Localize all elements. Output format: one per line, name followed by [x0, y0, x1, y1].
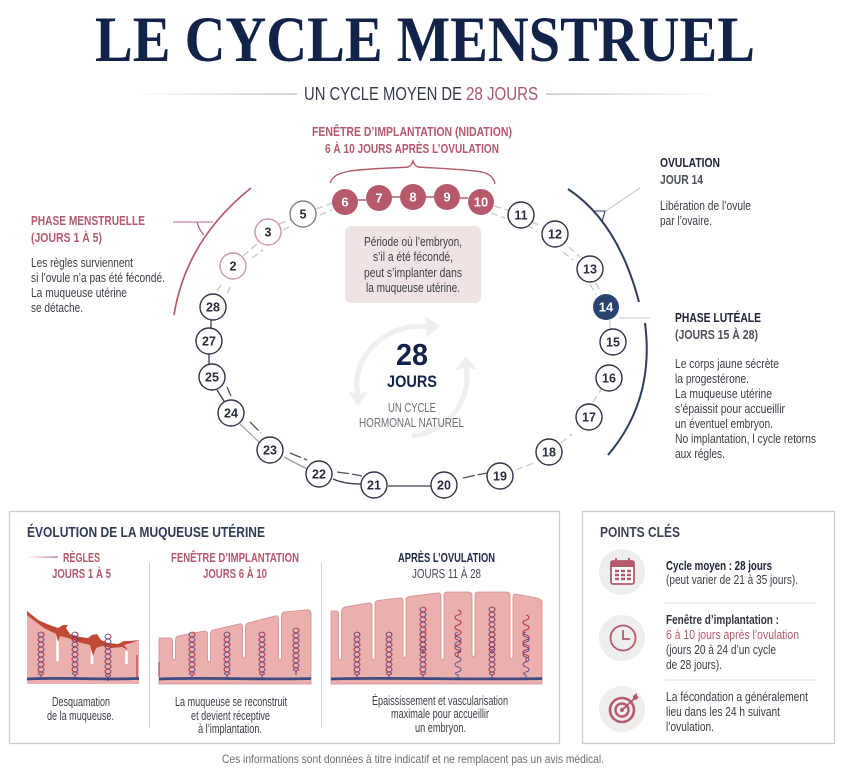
day circles: 18 — [542, 446, 556, 460]
text: implantation window: (jours 20 à 24 d’un cycle — [666, 643, 776, 657]
panel: menstrual phase: PHASE MENSTRUELLE — [31, 213, 145, 228]
text: implantation window: de 28 jours). — [666, 658, 722, 672]
callout: implantation period: peut s’implanter dans — [364, 266, 462, 280]
day circles: 10 — [474, 194, 488, 210]
title: LE CYCLE MENSTRUEL — [95, 4, 755, 76]
text: implantation window — [666, 613, 799, 672]
callout: implantation period: la muqueuse utérine. — [366, 281, 460, 295]
cycle ring: days 1 to 28 — [196, 184, 626, 498]
day circles: 2 — [230, 260, 237, 274]
day circles: 11 — [514, 208, 528, 222]
day circles: 22 — [312, 468, 326, 482]
panel: menstrual phase: Les règles surviennent — [31, 256, 133, 270]
text: fertilisation — [666, 690, 808, 734]
heading: key points: POINTS CLÉS — [600, 524, 680, 541]
day circles: 16 — [602, 372, 616, 386]
panel: menstrual phase: (JOURS 1 À 5) — [31, 230, 102, 245]
day circles: 12 — [548, 228, 562, 242]
subtitle: UN CYCLE MOYEN DE — [304, 84, 462, 104]
column: implantation window: JOURS 6 À 10 — [203, 566, 267, 581]
icon: calendar — [599, 549, 645, 595]
day circles: 15 — [606, 336, 620, 350]
center: 28 days: JOURS — [387, 373, 437, 391]
heading: implantation window: 6 À 10 JOURS APRÈS L’OVULATION — [325, 141, 499, 156]
day circles: 8 — [409, 190, 417, 204]
icon: circular arrows — [349, 317, 476, 436]
text: fertilisation: La fécondation a généralement — [666, 690, 808, 704]
column: after ovulation: Épaississement et vascularisation — [372, 693, 508, 708]
panel: menstrual phase: se détache. — [31, 301, 83, 315]
day circles: 9 — [443, 190, 451, 204]
illustration: thick lining — [331, 592, 542, 684]
column: implantation window: FENÊTRE D’IMPLANTATION — [171, 550, 299, 565]
arc: menstrual phase — [173, 188, 251, 315]
heading: implantation window — [312, 124, 512, 156]
panel: luteal phase: la progestérone. — [675, 372, 749, 386]
column: periods: de la muqueuse. — [47, 709, 114, 723]
column: implantation window: à l’implantation. — [198, 722, 262, 736]
column: implantation window — [159, 550, 311, 736]
illustration: rebuilding lining — [159, 610, 311, 684]
icon: target — [599, 686, 645, 732]
heading: uterine lining: ÉVOLUTION DE LA MUQUEUSE UTÉRINE — [27, 524, 265, 541]
text: fertilisation: lieu dans les 24 h suivant — [666, 705, 780, 719]
column: after ovulation — [331, 550, 542, 735]
day circles: 20 — [437, 478, 451, 492]
panel: luteal phase: La muqueuse utérine — [675, 387, 772, 401]
text: average cycle — [666, 559, 798, 587]
day circles: 27 — [202, 334, 216, 348]
connectors — [209, 197, 610, 486]
panel: ovulation: Libération de l’ovule — [660, 199, 751, 213]
day circles: 24 — [224, 406, 238, 420]
panel: menstrual phase: si l’ovule n’a pas été fécondé. — [31, 271, 165, 285]
arc: ovulation — [568, 188, 640, 302]
column: periods: Desquamation — [52, 695, 110, 709]
callout: implantation period: s’il a été fécondé, — [373, 250, 453, 264]
subtitle: 28 JOURS — [466, 84, 538, 104]
panel: ovulation: OVULATION — [660, 155, 720, 170]
panel: menstrual phase: La muqueuse utérine — [31, 286, 127, 300]
text: implantation window: 6 à 10 jours après l’ovulation — [666, 628, 799, 642]
day circles: 25 — [205, 370, 219, 384]
column: after ovulation: JOURS 11 À 28 — [412, 566, 481, 581]
center: 28 days: HORMONAL NATUREL — [359, 416, 464, 430]
panel: luteal phase: s’épaissit pour accueillir — [675, 402, 785, 416]
panel: luteal phase: un éventuel embryon. — [675, 417, 773, 431]
column: after ovulation: APRÈS L’OVULATION — [398, 550, 495, 565]
text: implantation window: Fenêtre d’implantation : — [666, 613, 779, 627]
day circles: 6 — [341, 194, 349, 210]
text: average cycle: Cycle moyen : 28 jours — [666, 559, 772, 573]
day circles: 21 — [367, 478, 381, 492]
text: fertilisation: l’ovulation. — [666, 720, 714, 734]
panel: luteal phase — [608, 310, 816, 461]
subtitle — [130, 84, 722, 104]
center: 28 days: UN CYCLE — [388, 401, 436, 415]
panel: luteal phase: (JOURS 15 À 28) — [675, 327, 758, 342]
brace: implantation window — [330, 161, 495, 184]
day circles — [196, 184, 626, 498]
column: after ovulation: un embryon. — [415, 721, 466, 735]
day circles: 13 — [583, 262, 597, 276]
panel: uterine lining evolution — [10, 512, 560, 744]
day circles: 3 — [265, 226, 272, 240]
panel: key points — [582, 512, 834, 744]
illustration: shedding lining — [27, 611, 139, 684]
day circles: 17 — [582, 410, 596, 424]
panel: luteal phase: No implantation, l cycle retorns — [675, 432, 816, 446]
text: average cycle: (peut varier de 21 à 35 jours). — [666, 573, 798, 587]
column: periods — [27, 550, 139, 723]
day circles: 19 — [493, 470, 507, 484]
column: implantation window: La muqueuse se reconstruit — [175, 695, 287, 709]
footer note: Ces informations sont données à titre indicatif et ne remplacent pas un avis médical. — [222, 752, 604, 766]
column: after ovulation: maximale pour accueillir — [391, 707, 489, 721]
column: periods: RÈGLES — [63, 550, 100, 565]
arc: luteal phase — [608, 318, 650, 455]
panel: luteal phase: aux régles. — [675, 447, 725, 461]
panel: menstrual phase — [31, 188, 251, 315]
day circles: 14 — [599, 300, 614, 314]
center: 28 days: 28 — [396, 337, 428, 372]
day circles: 28 — [206, 300, 220, 314]
icon: clock — [599, 615, 645, 661]
day circles: 23 — [263, 444, 277, 458]
column: periods: JOURS 1 À 5 — [52, 566, 111, 581]
day circles: 5 — [300, 208, 307, 222]
callout: implantation period: Période où l’embryon, — [364, 235, 462, 249]
callout: implantation period — [345, 226, 481, 303]
panel: ovulation: JOUR 14 — [660, 172, 704, 187]
panel: luteal phase: PHASE LUTÉALE — [675, 310, 761, 325]
panel: ovulation: par l’ovaire. — [660, 214, 712, 228]
column: implantation window: et devient réceptive — [191, 709, 270, 723]
day circles: 7 — [375, 190, 383, 206]
heading: implantation window: FENÊTRE D’IMPLANTATION (NIDATION) — [312, 124, 512, 139]
center: 28 days — [349, 317, 476, 436]
panel: luteal phase: Le corps jaune sécrète — [675, 357, 779, 371]
panel: ovulation — [568, 155, 751, 302]
